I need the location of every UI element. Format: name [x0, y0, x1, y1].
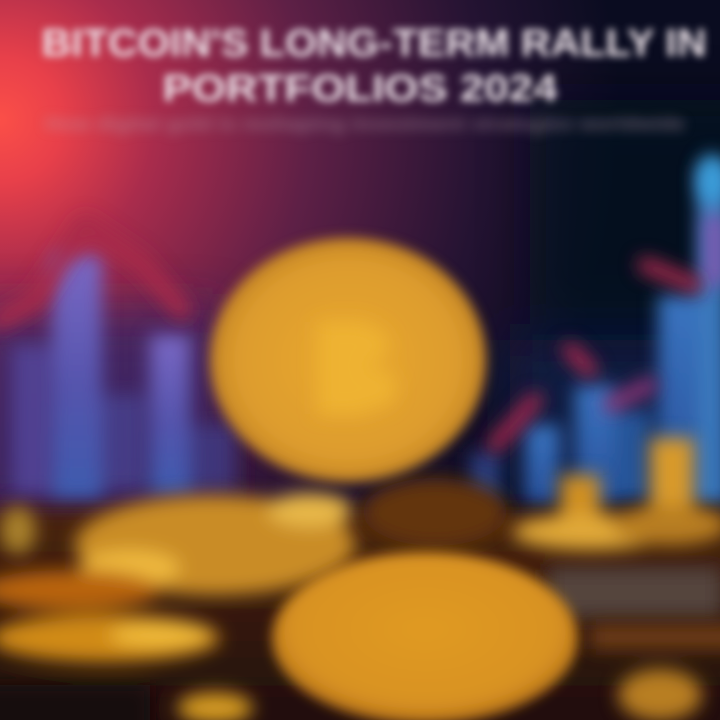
floor: [0, 510, 720, 720]
coin: front large: [272, 552, 578, 720]
chart: left bars: [12, 255, 235, 500]
chart: right bars: [470, 165, 720, 505]
chart: right bar highlight: [698, 154, 720, 285]
title: [42, 22, 706, 110]
coin pile: right: [512, 438, 720, 720]
coin: dark middle: [363, 478, 507, 546]
chart: left red trend line: [0, 225, 182, 320]
coin: large center: [210, 238, 486, 482]
coin pile: left: [0, 493, 355, 720]
icon: bitcoin symbol on large coin: [318, 322, 396, 414]
title: BITCOIN'S LONG-TERM RALLY IN: [42, 22, 706, 65]
chart: right red trend line: [495, 265, 695, 445]
background: lower haze: [0, 100, 720, 510]
subtitle: How digital gold is reshaping investment strategies worldwide: [45, 114, 685, 134]
title: PORTFOLIOS 2024: [162, 68, 558, 110]
